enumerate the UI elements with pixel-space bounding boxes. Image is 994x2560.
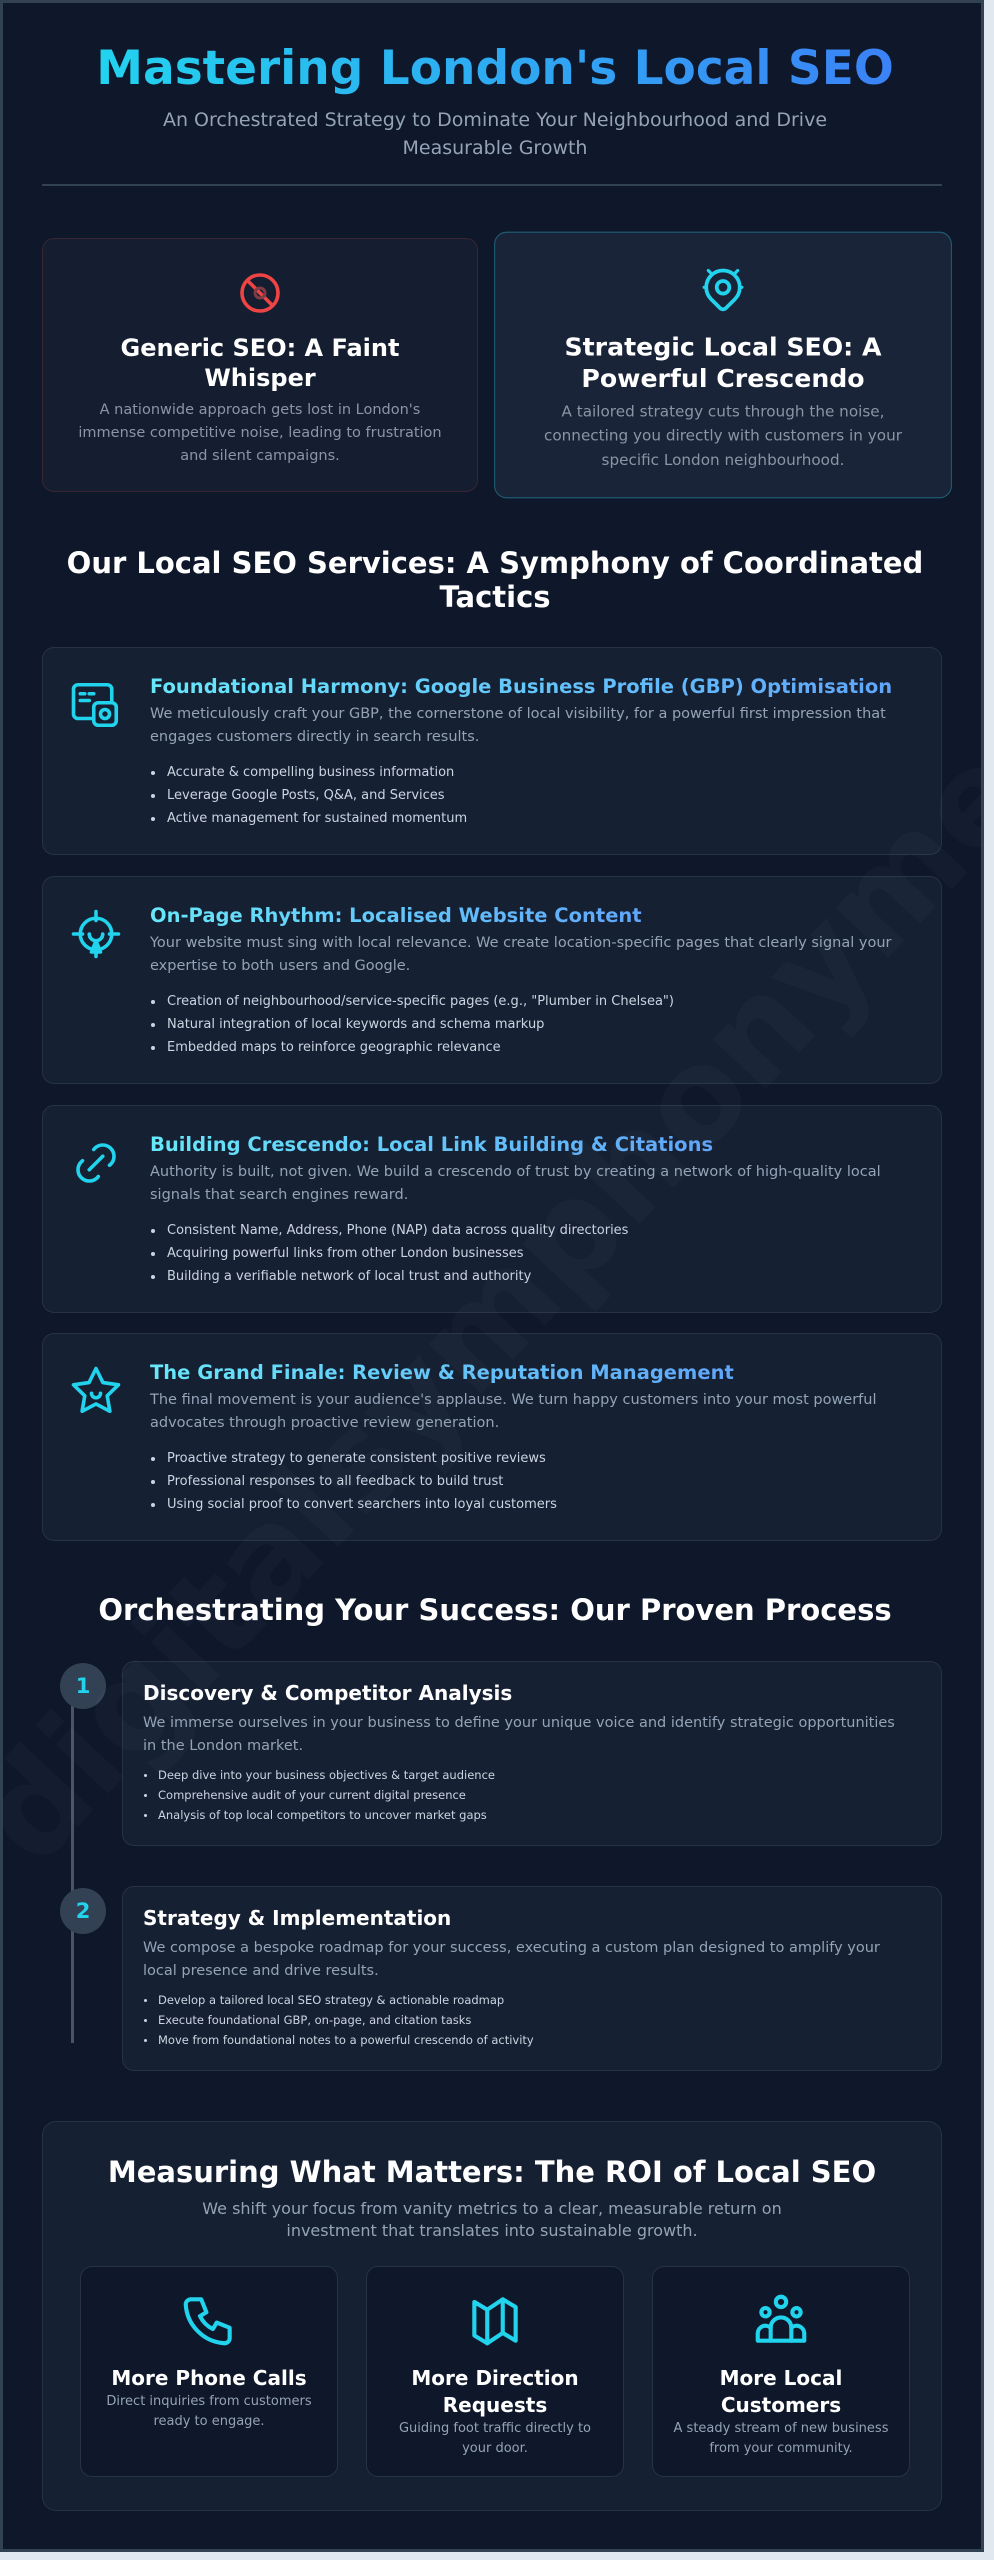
panel: strategic local SEO [494,232,952,498]
heading: customers: More Local Customers [720,2366,842,2417]
heading: step 2: Strategy & Implementation [143,1906,451,1930]
list: link building [151,1223,628,1284]
icon: users [756,2294,806,2343]
heading: services: Our Local SEO Services: A Symphony of Coordinated Tactics [67,546,923,614]
icon: ban [240,273,280,313]
text: on-page: Your website must sing with local relevance. We create location-specific pages that clearly signal your expertise to both users and Google. [150,935,891,974]
card: customers [652,2266,910,2477]
list: step 2: Move from foundational notes to a powerful crescendo of activity [158,2033,534,2047]
panel: step 1 [122,1661,942,1846]
list: on-page: Natural integration of local keywords and schema markup [167,1017,544,1032]
list: GBP [151,765,467,826]
list: reviews [151,1451,557,1512]
icon: map pin [702,268,744,312]
text: customers: A steady stream of new business from your community. [674,2421,888,2456]
list: step 1 [144,1768,495,1822]
step 1 number: 1 [76,1674,90,1698]
text: link building: Authority is built, not given. We build a crescendo of trust by creating a network of high-quality local signals that search engines reward. [150,1164,881,1203]
panel: on-page [42,876,942,1084]
subtitle: An Orchestrated Strategy to Dominate Your Neighbourhood and Drive Measurable Growth [163,109,827,159]
text: ROI: We shift your focus from vanity metrics to a clear, measurable return on investment that translates into sustainable growth. [202,2199,782,2240]
card: phone calls [80,2266,338,2477]
list: link building: Acquiring powerful links from other London businesses [167,1246,524,1261]
icon: target [72,910,120,958]
text: GBP: We meticulously craft your GBP, the cornerstone of local visibility, for a powerful first impression that engages customers directly in search results. [150,706,886,745]
heading: phone: More Phone Calls [111,2366,307,2390]
panel: GBP [42,647,942,855]
list: GBP: Leverage Google Posts, Q&A, and Services [167,788,445,803]
text: strategic: A tailored strategy cuts through the noise, connecting you directly with customers in your specific London neighbourhood. [544,404,902,469]
heading: strategic: Strategic Local SEO: A Powerful Crescendo [564,332,882,393]
list: reviews: Professional responses to all feedback to build trust [167,1474,503,1489]
list: on-page: Creation of neighbourhood/service-specific pages (e.g., "Plumber in Chelsea") [167,994,674,1009]
text: reviews: The final movement is your audience's applause. We turn happy customers into your most powerful advocates through proactive review generation. [150,1392,877,1431]
heading: generic: Generic SEO: A Faint Whisper [121,334,399,392]
list: GBP: Active management for sustained momentum [167,811,467,826]
heading: GBP: Foundational Harmony: Google Business Profile (GBP) Optimisation [150,675,892,698]
icon: star [72,1366,120,1414]
card: directions [366,2266,624,2477]
list: step 2 [144,1993,534,2047]
step 2 number [60,1888,106,1934]
title: Mastering London's Local SEO [96,41,894,96]
list: step 1: Deep dive into your business objectives & target audience [158,1768,495,1782]
heading: step 1: Discovery & Competitor Analysis [143,1681,512,1705]
panel: ROI [42,2121,942,2511]
panel: link building [42,1105,942,1313]
text: generic: A nationwide approach gets lost in London's immense competitive noise, leading to frustration and silent campaigns. [78,402,442,464]
list: link building: Building a verifiable network of local trust and authority [167,1269,531,1284]
list: GBP: Accurate & compelling business information [167,765,454,780]
text: phone: Direct inquiries from customers ready to engage. [106,2394,312,2429]
heading: ROI: Measuring What Matters: The ROI of Local SEO [108,2155,876,2189]
icon: link [76,1143,116,1183]
icon: phone [184,2297,232,2346]
heading: reviews: The Grand Finale: Review & Reputation Management [150,1361,734,1384]
icon: map [472,2297,518,2346]
panel: step 2 [122,1886,942,2071]
step 1 number [60,1663,106,1709]
heading: directions: More Direction Requests [411,2366,579,2417]
panel: reviews [42,1333,942,1541]
list: step 2: Execute foundational GBP, on-page, and citation tasks [158,2013,471,2027]
heading: link building: Building Crescendo: Local Link Building & Citations [150,1133,713,1156]
text: step 2: We compose a bespoke roadmap for your success, executing a custom plan designed to amplify your local presence and drive results. [143,1940,880,1979]
panel: generic SEO [42,238,478,492]
list: on-page [151,994,674,1055]
list: reviews: Using social proof to convert searchers into loyal customers [167,1497,557,1512]
list: step 1: Analysis of top local competitors to uncover market gaps [158,1808,487,1822]
text: directions: Guiding foot traffic directly to your door. [399,2421,591,2456]
list: on-page: Embedded maps to reinforce geographic relevance [167,1040,501,1055]
list: step 2: Develop a tailored local SEO strategy & actionable roadmap [158,1993,504,2007]
timeline line [71,1703,74,2043]
heading: on-page: On-Page Rhythm: Localised Website Content [150,904,642,927]
step 2 number: 2 [76,1899,90,1923]
icon: business profile [72,683,118,727]
list: link building: Consistent Name, Address, Phone (NAP) data across quality directories [167,1223,628,1238]
heading: process: Orchestrating Your Success: Our Proven Process [98,1593,892,1627]
text: step 1: We immerse ourselves in your business to define your unique voice and identify strategic opportunities in the London market. [143,1715,895,1754]
list: reviews: Proactive strategy to generate consistent positive reviews [167,1451,546,1466]
list: step 1: Comprehensive audit of your current digital presence [158,1788,466,1802]
